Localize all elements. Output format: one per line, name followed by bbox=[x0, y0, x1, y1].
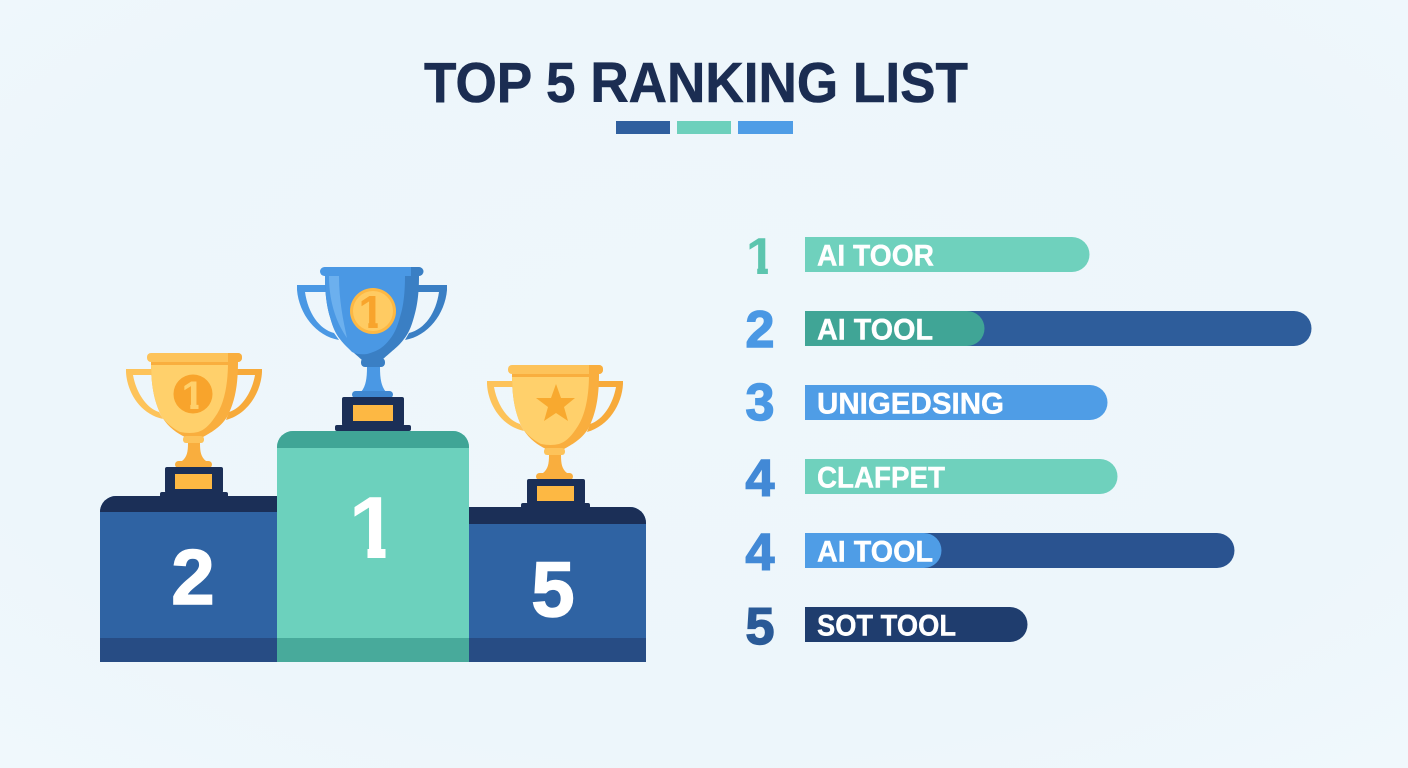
icon: star bbox=[536, 384, 575, 421]
podium step: fifth place: 5 bbox=[531, 545, 575, 633]
row 4: CLAFPET bbox=[746, 450, 1118, 508]
podium bbox=[100, 431, 646, 662]
medal: number 1 bbox=[174, 374, 212, 414]
trophy: centre blue with gold medal bbox=[297, 267, 447, 431]
podium step: first place: 1 bbox=[349, 478, 397, 577]
row 1: AI TOOR: AI TOOR bbox=[817, 240, 934, 272]
row 3: UNIGEDSING: 3 bbox=[746, 374, 774, 432]
row 1: AI TOOR bbox=[750, 237, 1090, 274]
podium step: second place: 2 bbox=[171, 533, 215, 621]
podium step: fifth place bbox=[469, 507, 646, 662]
trophy: right gold with star bbox=[487, 365, 623, 509]
row 6: SOT TOOL bbox=[746, 598, 1028, 656]
podium step: first place bbox=[277, 431, 469, 662]
row 4: CLAFPET: CLAFPET bbox=[817, 462, 945, 494]
row 3: UNIGEDSING bbox=[746, 374, 1108, 432]
infographic canvas bbox=[100, 62, 1312, 662]
row 5: AI TOOL bbox=[746, 524, 1234, 582]
title: TOP 5 RANKING LIST bbox=[424, 51, 968, 115]
row 5: AI TOOL: AI TOOL bbox=[817, 536, 933, 568]
row 6: SOT TOOL: SOT TOOL bbox=[817, 610, 956, 642]
ranking list bbox=[746, 228, 1312, 656]
row 2: AI TOOL bbox=[746, 301, 1312, 359]
row 5: AI TOOL: 4 bbox=[746, 524, 775, 582]
medal: number 1: 1 bbox=[182, 374, 204, 418]
row 4: CLAFPET: 4 bbox=[746, 450, 775, 508]
medal: number 1: 1 bbox=[358, 286, 384, 338]
title underline: three colour blocks bbox=[616, 121, 793, 134]
row 3: UNIGEDSING: UNIGEDSING bbox=[817, 388, 1004, 420]
row 2: AI TOOL: 2 bbox=[746, 301, 774, 359]
podium step: second place bbox=[100, 496, 277, 662]
row 2: AI TOOL: AI TOOL bbox=[817, 314, 933, 346]
trophy: left gold with number 1 medal bbox=[126, 353, 262, 498]
row 6: SOT TOOL: 5 bbox=[746, 598, 774, 656]
row 1: AI TOOR: 1 bbox=[746, 228, 775, 286]
medal: number 1 bbox=[350, 288, 396, 334]
